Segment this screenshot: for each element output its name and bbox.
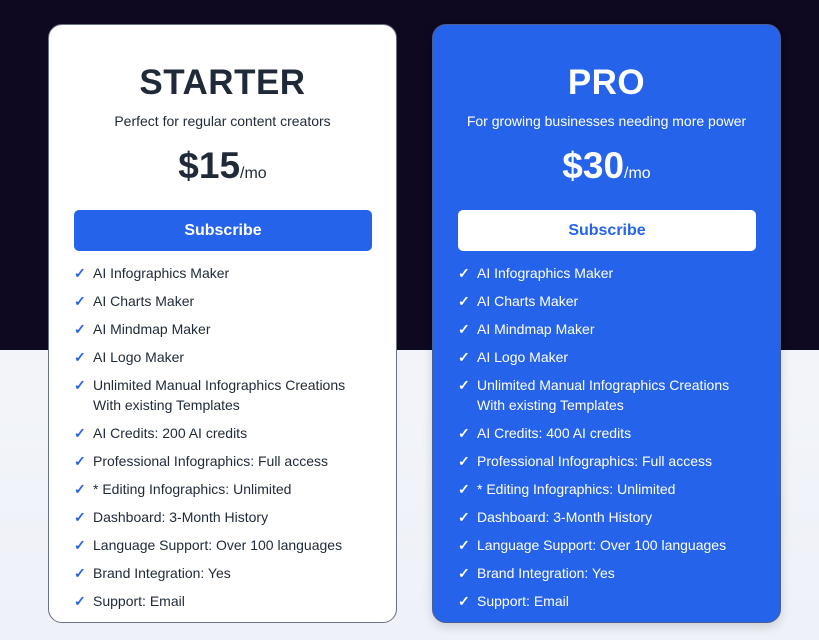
feature list: * Editing Infographics: Unlimited [93, 481, 291, 497]
feature list: Language Support: Over 100 languages [477, 537, 726, 553]
feature list: With existing Templates [477, 397, 624, 413]
feature list: Brand Integration: Yes [93, 565, 231, 581]
feature list: AI Infographics Maker [93, 265, 229, 281]
feature list: Brand Integration: Yes [477, 565, 615, 581]
feature list: Professional Infographics: Full access [93, 453, 328, 469]
title: starter: STARTER [139, 63, 306, 102]
button: subscribe: Subscribe [184, 222, 262, 239]
feature list: AI Charts Maker [93, 293, 194, 309]
feature list: AI Charts Maker [477, 293, 578, 309]
feature list: Language Support: Over 100 languages [93, 537, 342, 553]
feature list: Support: Email [477, 593, 569, 609]
feature list: AI Infographics Maker [477, 265, 613, 281]
feature list: AI Credits: 400 AI credits [477, 425, 631, 441]
feature list: With existing Templates [93, 397, 240, 413]
feature list: Unlimited Manual Infographics Creations [477, 377, 729, 393]
feature list: Support: Email [93, 593, 185, 609]
feature list: AI Mindmap Maker [93, 321, 210, 337]
feature list [460, 265, 729, 609]
feature list: AI Credits: 200 AI credits [93, 425, 247, 441]
button: subscribe: Subscribe [568, 222, 646, 239]
price: $30/mo [562, 145, 651, 186]
feature list: AI Mindmap Maker [477, 321, 594, 337]
panel: starter plan [48, 24, 397, 623]
feature list: Dashboard: 3-Month History [93, 509, 268, 525]
feature list: Dashboard: 3-Month History [477, 509, 652, 525]
title: pro: PRO [568, 63, 645, 102]
feature list: Professional Infographics: Full access [477, 453, 712, 469]
subtitle: Perfect for regular content creators [114, 113, 331, 129]
button: subscribe [458, 210, 756, 251]
subtitle: For growing businesses needing more power [467, 113, 746, 129]
feature list: AI Logo Maker [477, 349, 568, 365]
feature list: AI Logo Maker [93, 349, 184, 365]
button: subscribe [74, 210, 372, 251]
feature list: * Editing Infographics: Unlimited [477, 481, 675, 497]
price: $15/mo [178, 145, 267, 186]
feature list: Unlimited Manual Infographics Creations [93, 377, 345, 393]
feature list [76, 265, 345, 609]
panel: pro plan [432, 24, 781, 623]
